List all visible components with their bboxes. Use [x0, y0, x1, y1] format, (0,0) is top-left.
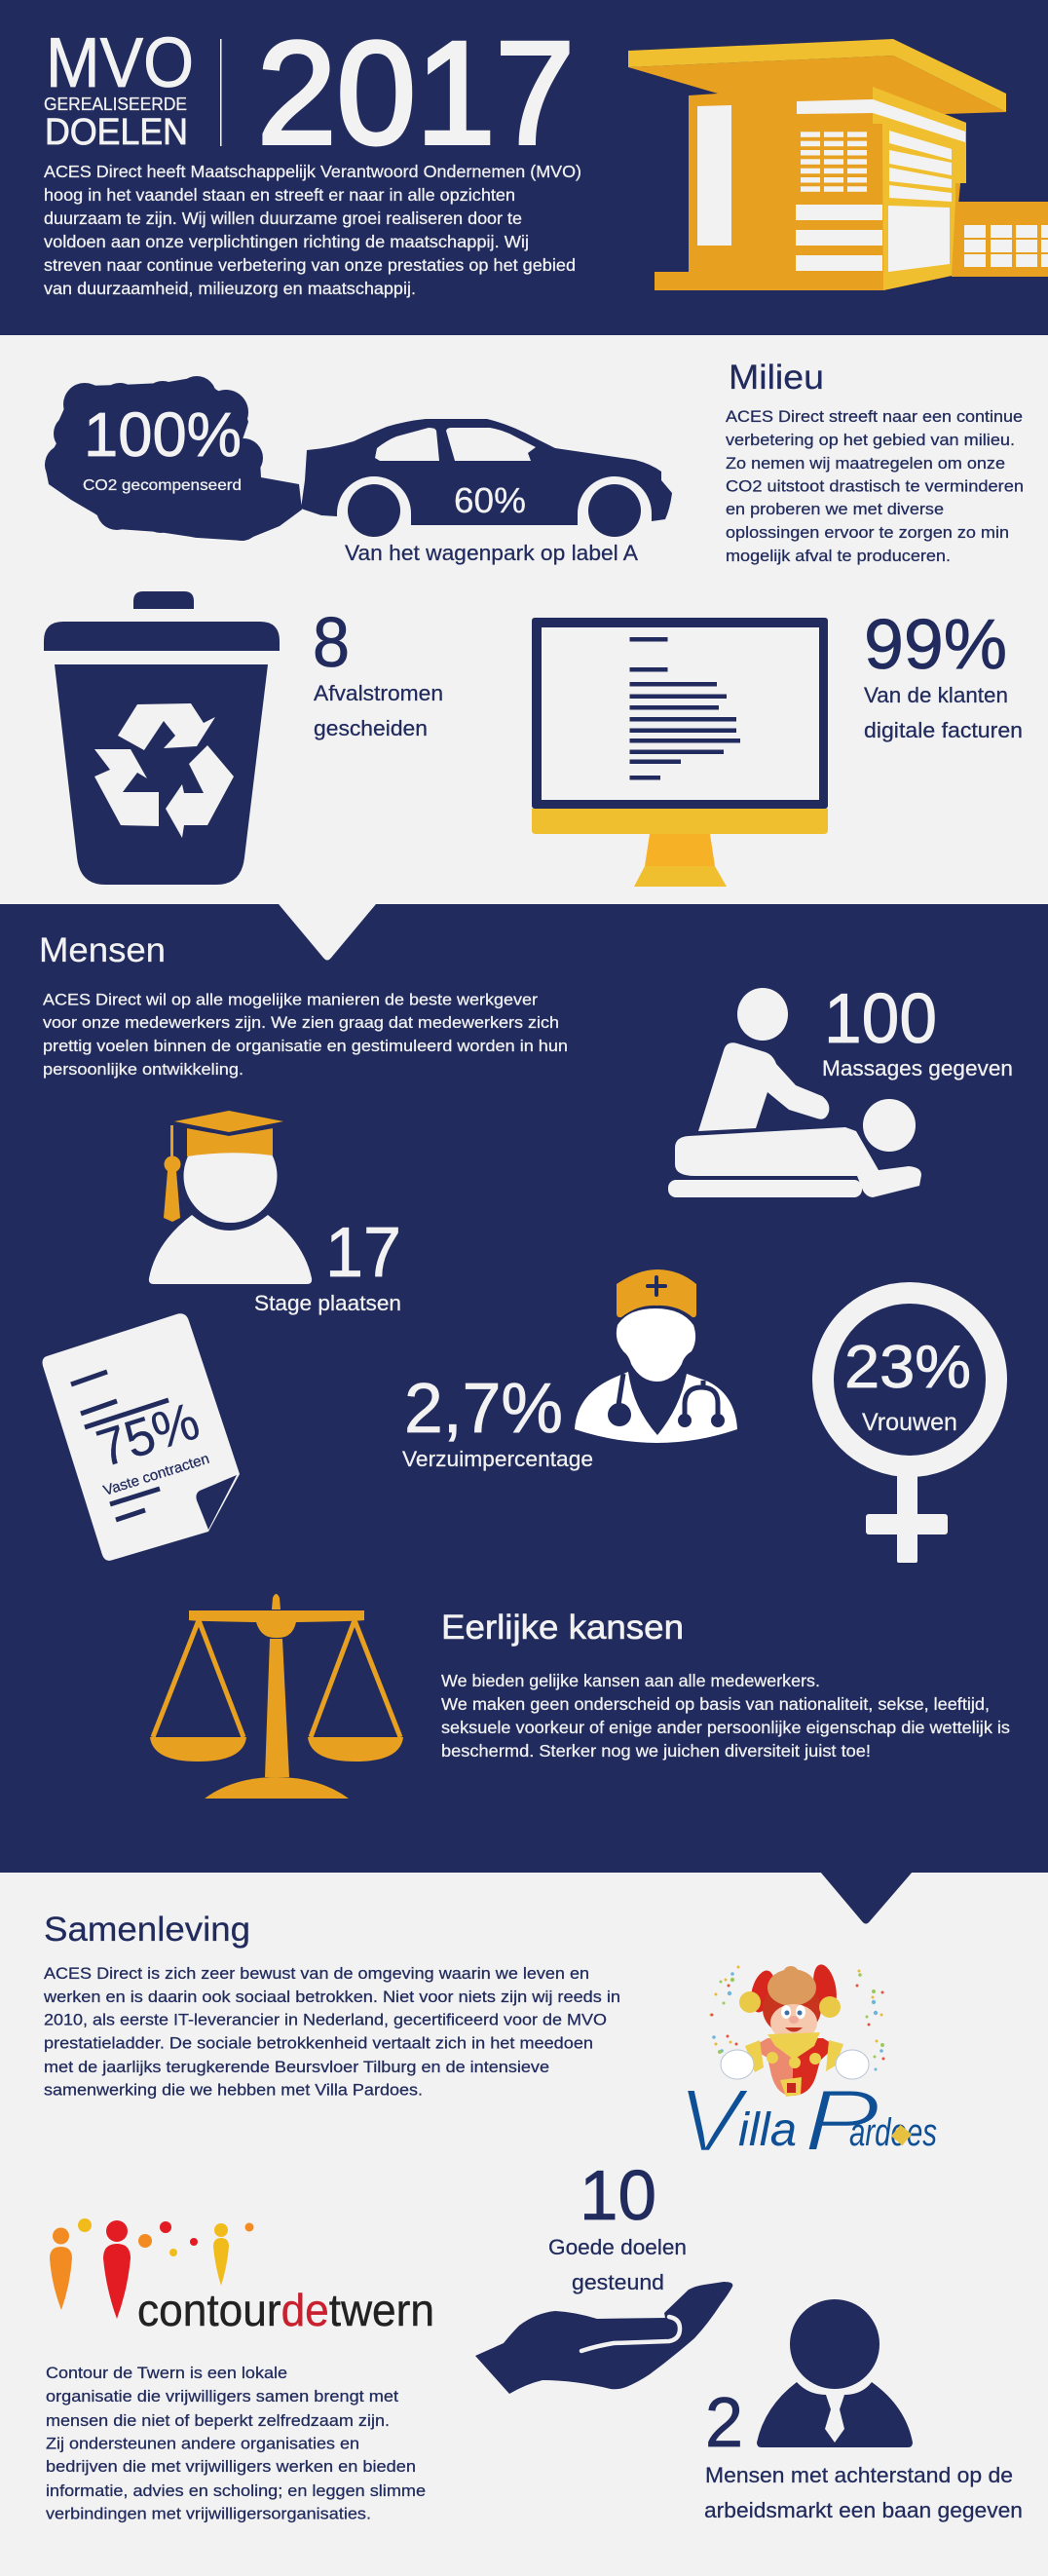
intro text [44, 162, 581, 298]
stat: 75%: 75% [91, 1391, 206, 1478]
label: arbeidsmarkt: arbeidsmarkt een baan gegeven [704, 2498, 1023, 2522]
icon: contract document [43, 1313, 240, 1561]
icon: mascot [709, 1962, 884, 2097]
label: arbeidsmarkt: Mensen met achterstand op de [705, 2463, 1013, 2487]
text: samenleving: met de jaarlijks terugkerende Beursvloer Tilburg en de intensieve [44, 2058, 549, 2076]
heading: Milieu: Milieu [729, 359, 824, 397]
logo: Villa Pardoes [678, 1962, 937, 2171]
text: milieu: oplossingen ervoor te zorgen zo min [726, 523, 1009, 542]
label: massages: Massages gegeven [822, 1056, 1013, 1080]
label: arbeidsmarkt [704, 2463, 1023, 2522]
panel: mensen [0, 904, 1048, 1873]
text: contour de twern: Contour de Twern is een lokale [46, 2364, 287, 2382]
label: verzuim: Verzuimpercentage [402, 1447, 593, 1471]
stat: 100: 100 [824, 980, 937, 1058]
text: eerlijke kansen: beschermd. Sterker nog we juichen diversiteit juist toe! [441, 1741, 871, 1761]
label: wagenpark: Van het wagenpark op label A [345, 541, 638, 565]
stat: 10: 10 [580, 2157, 656, 2235]
text: samenleving: prestatieladder. De sociale betrokkenheid vertaalt zich in het meedoen [44, 2034, 593, 2052]
icon: monitor [532, 618, 828, 887]
label: goede doelen: gesteund [572, 2270, 664, 2294]
text: milieu: en proberen we met diverse [726, 500, 944, 518]
text: eerlijke kansen: seksuele voorkeur of enige ander persoonlijke eigenschap die wettelijk is [441, 1718, 1010, 1737]
icon: doctor [575, 1269, 737, 1443]
icon: car [301, 419, 672, 537]
label: afvalstromen [314, 681, 443, 740]
text: samenleving: 2010, als eerste IT-leverancier in Nederland, gecertificeerd voor de MVO [44, 2011, 607, 2028]
icon: scales [150, 1594, 403, 1799]
heading: Eerlijke kansen: Eerlijke kansen [441, 1609, 684, 1647]
label: stage: Stage plaatsen [254, 1291, 401, 1315]
text: contour de twern: bedrijven die met vrijwilligers werken en bieden [46, 2457, 416, 2476]
text: mensen [43, 990, 568, 1079]
text: milieu: CO2 uitstoot drastisch te verminderen [726, 477, 1024, 495]
icon: massage [668, 988, 921, 1197]
intro text: voldoen aan onze verplichtingen richting de maatschappij. Wij [44, 232, 529, 251]
panel: header [0, 0, 1048, 335]
panel: milieu [44, 359, 1024, 887]
logo wordmark: illa [738, 2104, 797, 2156]
subtitle: gerealiseerde: GEREALISEERDE [44, 95, 187, 114]
text: milieu [726, 407, 1024, 565]
logo wordmark: P [804, 2072, 880, 2170]
label: vrouwen: Vrouwen [862, 1409, 957, 1436]
panel: samenleving [43, 1872, 1023, 2523]
text: milieu: ACES Direct streeft naar een continue [726, 407, 1023, 426]
text: milieu: Zo nemen wij maatregelen om onze [726, 454, 1005, 473]
text: samenleving [43, 1964, 620, 2099]
stat: 2,7%: 2,7% [404, 1370, 563, 1448]
logo wordmark: V [678, 2071, 750, 2171]
logo: Contour de Twern [50, 2218, 434, 2335]
label: facturen: Van de klanten [864, 683, 1008, 707]
label: vaste contracten: Vaste contracten [101, 1451, 211, 1499]
logo wordmark: ardoes [849, 2111, 937, 2154]
stat: 99%: 99% [864, 606, 1007, 684]
intro text: ACES Direct heeft Maatschappelijk Verantwoord Ondernemen (MVO) [44, 162, 581, 181]
title: year: 2017 [257, 11, 575, 174]
icon: person with tie [757, 2299, 913, 2447]
text: eerlijke kansen: We bieden gelijke kansen aan alle medewerkers. [441, 1671, 820, 1690]
label: goede doelen [548, 2235, 687, 2294]
text: contour de twern: mensen die niet of beperkt zelfredzaam zijn. [46, 2411, 390, 2430]
logo wordmark [678, 2071, 937, 2171]
stat: 8: 8 [313, 604, 350, 682]
heading: Samenleving: Samenleving [44, 1911, 250, 1949]
text: mensen: voor onze medewerkers zijn. We zien graag dat medewerkers zich [43, 1013, 559, 1032]
text: milieu: mogelijk afval te produceren. [726, 547, 951, 565]
text: mensen: prettig voelen binnen de organisatie en gestimuleerd worden in hun [43, 1037, 568, 1055]
label: facturen [864, 683, 1023, 742]
intro text: duurzaam te zijn. Wij willen duurzame groei realiseren door te [44, 208, 522, 228]
text: contour de twern: informatie, advies en scholing; en leggen slimme [46, 2481, 426, 2500]
icon: open hand [475, 2282, 732, 2394]
text: eerlijke kansen [441, 1671, 1010, 1761]
stat: 17: 17 [325, 1214, 401, 1292]
intro text: hoog in het vaandel staan en streeft er naar in alle opzichten [44, 185, 515, 205]
label: afvalstromen: Afvalstromen [314, 681, 443, 705]
text: contour de twern: organisatie die vrijwilligers samen brengt met [46, 2387, 398, 2406]
logo: Contour de Twern: contourdetwern [137, 2285, 434, 2335]
icon: exhaust cloud [45, 376, 302, 541]
label: CO2: CO2 gecompenseerd [83, 477, 242, 494]
icon: building [628, 39, 1048, 290]
text: samenleving: werken en is daarin ook sociaal betrokken. Niet voor niets zijn wij reeds in [43, 1988, 620, 2006]
text: samenleving: ACES Direct is zich zeer bewust van de omgeving waarin we leven en [44, 1964, 589, 1983]
label: goede doelen: Goede doelen [548, 2235, 687, 2259]
text: samenleving: samenwerking die we hebben met Villa Pardoes. [44, 2081, 423, 2099]
icon: graduate [149, 1111, 312, 1284]
icon: recycling bin [44, 591, 280, 885]
text: eerlijke kansen: We maken geen onderscheid op basis van nationaliteit, sekse, leeftijd, [441, 1694, 990, 1714]
text: mensen: persoonlijke ontwikkeling. [43, 1060, 243, 1079]
label: afvalstromen: gescheiden [314, 716, 428, 740]
stat: 23%: 23% [844, 1334, 971, 1401]
subtitle: doelen: DOELEN [45, 112, 188, 153]
heading: Mensen: Mensen [39, 931, 166, 969]
label: facturen: digitale facturen [864, 718, 1023, 742]
text: mensen: ACES Direct wil op alle mogelijke manieren de beste werkgever [43, 990, 538, 1009]
title: MVO: MVO [46, 24, 194, 102]
text: milieu: verbetering op het gebied van milieu. [726, 431, 1015, 449]
intro text: streven naar continue verbetering van onze prestaties op het gebied [44, 255, 576, 275]
intro text: van duurzaamheid, milieuzorg en maatschappij. [44, 279, 416, 298]
text: contour de twern: Zij ondersteunen andere organisaties en [46, 2434, 359, 2453]
stat: 100%: 100% [84, 399, 242, 470]
stat: 2: 2 [705, 2384, 743, 2462]
icon: female symbol [823, 1293, 996, 1563]
text: contour de twern: verbindingen met vrijwilligersorganisaties. [46, 2504, 371, 2523]
text: contour de twern [46, 2364, 426, 2523]
stat: 60%: 60% [454, 480, 526, 520]
